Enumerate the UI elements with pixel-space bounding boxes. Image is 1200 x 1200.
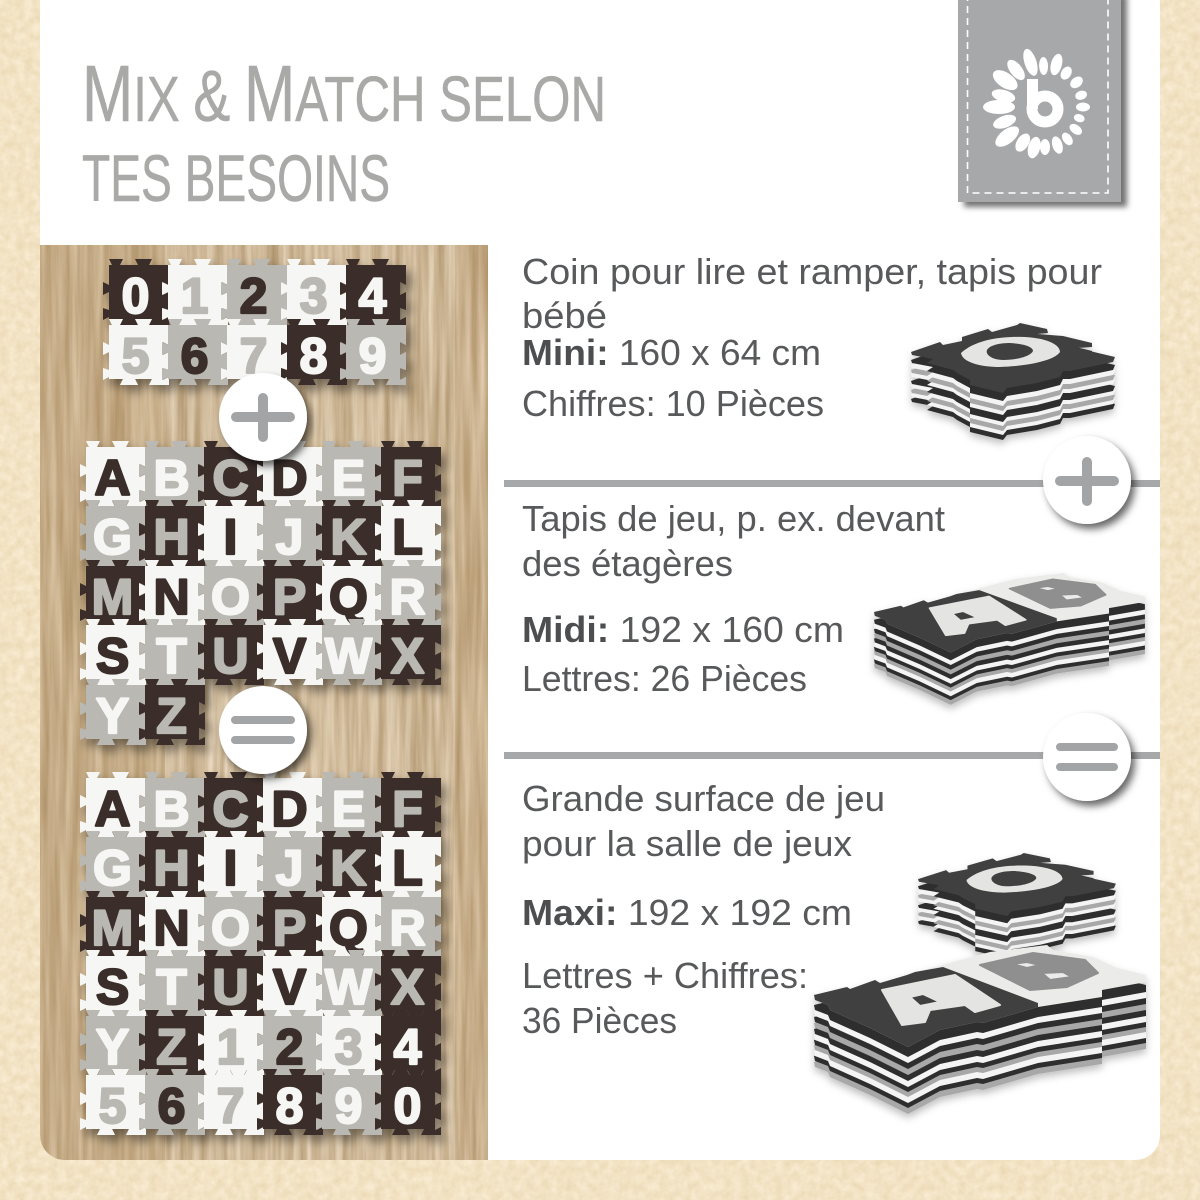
title: MIX & MATCH SELON xyxy=(82,49,606,138)
brand tag with logo xyxy=(958,0,1121,202)
puzzle mat: numbers 0-9: 8 xyxy=(300,328,327,384)
puzzle stack: maxi xyxy=(814,853,1146,1114)
puzzle mat: numbers 0-9: 7 xyxy=(240,328,267,384)
text block: mini: Chiffres: 10 Pièces xyxy=(522,383,824,424)
puzzle mat: numbers 0-9: 2 xyxy=(240,268,267,324)
text block: maxi: Maxi: 192 x 192 cm xyxy=(522,892,852,933)
title: TES BESOINS xyxy=(82,141,390,215)
puzzle mat: letters and numbers combined: X xyxy=(391,959,424,1015)
puzzle mat: letters A-Z: U xyxy=(212,628,249,684)
text block: midi: des étagères xyxy=(522,543,733,584)
text block: mini: Mini: 160 x 64 cm xyxy=(522,332,821,373)
puzzle mat: letters and numbers combined: I xyxy=(224,840,237,896)
text block: mini: bébé xyxy=(522,295,607,336)
puzzle mat: letters and numbers combined: N xyxy=(153,900,190,956)
puzzle mat: letters A-Z: Z xyxy=(156,688,187,744)
puzzle mat: letters A-Z: M xyxy=(92,569,133,625)
puzzle mat: letters A-Z: Y xyxy=(96,688,129,744)
divider with plus badge xyxy=(504,436,1160,524)
puzzle mat: letters and numbers combined: 3 xyxy=(335,1019,362,1075)
text block: mini xyxy=(522,251,1102,424)
puzzle mat: letters and numbers combined: 8 xyxy=(276,1078,303,1134)
puzzle mat: letters and numbers combined: U xyxy=(212,959,249,1015)
puzzle mat: letters and numbers combined: Q xyxy=(329,900,368,956)
puzzle mat: letters and numbers combined: 7 xyxy=(217,1078,244,1134)
puzzle mat: numbers 0-9: 1 xyxy=(181,268,208,324)
puzzle mat: letters and numbers combined: M xyxy=(92,900,133,956)
puzzle mat: letters and numbers combined: F xyxy=(392,781,423,837)
divider with equals badge xyxy=(504,713,1160,801)
puzzle mat: letters and numbers combined: 5 xyxy=(99,1078,126,1134)
puzzle mat: letters and numbers combined: H xyxy=(153,840,190,896)
puzzle mat: letters and numbers combined: T xyxy=(156,959,187,1015)
puzzle mat: letters and numbers combined: V xyxy=(273,959,307,1015)
puzzle mat: letters and numbers combined: G xyxy=(93,840,132,896)
text block: maxi: Lettres + Chiffres: xyxy=(522,955,808,996)
puzzle mat: letters A-Z: P xyxy=(273,569,306,625)
puzzle mat: letters and numbers combined: A xyxy=(94,781,131,837)
puzzle mat: letters and numbers combined: 2 xyxy=(276,1019,303,1075)
puzzle mat: letters A-Z: O xyxy=(211,569,250,625)
puzzle mat: letters and numbers combined: 1 xyxy=(217,1019,244,1075)
puzzle mat: letters and numbers combined: S xyxy=(96,959,129,1015)
puzzle mat: letters and numbers combined: L xyxy=(392,840,423,896)
puzzle mat: letters A-Z: W xyxy=(325,628,373,684)
text block: midi: Midi: 192 x 160 cm xyxy=(522,609,844,650)
puzzle mat: letters A-Z: H xyxy=(153,509,190,565)
puzzle mat: letters A-Z: K xyxy=(330,509,367,565)
puzzle mat: letters and numbers combined: K xyxy=(330,840,367,896)
puzzle mat: letters and numbers combined: O xyxy=(211,900,250,956)
puzzle mat: letters and numbers combined: B xyxy=(153,781,190,837)
puzzle mat: numbers 0-9 xyxy=(103,259,406,385)
text block: maxi xyxy=(522,778,885,1041)
puzzle mat: letters and numbers combined: J xyxy=(276,840,303,896)
puzzle mat: letters and numbers combined: Z xyxy=(156,1019,187,1075)
puzzle mat: letters and numbers combined: D xyxy=(271,781,308,837)
puzzle mat: letters and numbers combined: R xyxy=(389,900,426,956)
puzzle mat: letters A-Z: N xyxy=(153,569,190,625)
equals badge on wood xyxy=(219,686,307,774)
puzzle mat: letters and numbers combined: C xyxy=(212,781,249,837)
text block: maxi: pour la salle de jeux xyxy=(522,823,852,864)
puzzle mat: letters A-Z: J xyxy=(276,509,303,565)
puzzle mat: letters A-Z: L xyxy=(392,509,423,565)
text block: mini: Coin pour lire et ramper, tapis pour xyxy=(522,251,1102,292)
puzzle mat: numbers 0-9: 9 xyxy=(359,328,386,384)
text block: midi: Lettres: 26 Pièces xyxy=(522,658,807,699)
plus badge on wood xyxy=(219,373,307,461)
puzzle mat: letters A-Z: I xyxy=(224,509,237,565)
wood floor panel xyxy=(40,245,488,1160)
puzzle mat: letters A-Z: Q xyxy=(329,569,368,625)
puzzle mat: letters A-Z: D xyxy=(271,450,308,506)
text block: midi: Tapis de jeu, p. ex. devant xyxy=(522,498,945,539)
puzzle mat: letters and numbers combined: 9 xyxy=(335,1078,362,1134)
puzzle mat: numbers 0-9: 4 xyxy=(359,268,387,324)
puzzle mat: letters A-Z: G xyxy=(93,509,132,565)
puzzle mat: letters A-Z: R xyxy=(389,569,426,625)
title xyxy=(82,49,606,215)
puzzle mat: letters A-Z: C xyxy=(212,450,249,506)
puzzle mat: letters A-Z: T xyxy=(156,628,187,684)
puzzle mat: letters and numbers combined: E xyxy=(332,781,365,837)
text block: maxi: Grande surface de jeu xyxy=(522,778,885,819)
puzzle mat: letters and numbers combined: Y xyxy=(96,1019,129,1075)
puzzle mat: numbers 0-9: 6 xyxy=(181,328,208,384)
puzzle mat: numbers 0-9: 0 xyxy=(122,268,149,324)
puzzle mat: letters A-Z: S xyxy=(96,628,129,684)
puzzle mat: letters A-Z: A xyxy=(94,450,131,506)
puzzle mat: numbers 0-9: 3 xyxy=(300,268,327,324)
puzzle mat: letters and numbers combined: P xyxy=(273,900,306,956)
puzzle mat: letters A-Z: X xyxy=(391,628,424,684)
puzzle mat: letters and numbers combined: 4 xyxy=(394,1019,422,1075)
puzzle mat: letters A-Z: F xyxy=(392,450,423,506)
puzzle mat: letters and numbers combined xyxy=(80,772,441,1135)
puzzle stack: mini xyxy=(911,323,1115,440)
puzzle mat: letters A-Z: E xyxy=(332,450,365,506)
text block: midi xyxy=(522,498,945,699)
text block: maxi: 36 Pièces xyxy=(522,1000,677,1041)
puzzle mat: letters and numbers combined: 0 xyxy=(394,1078,421,1134)
puzzle stack: midi xyxy=(874,573,1145,705)
puzzle mat: letters A-Z xyxy=(80,441,441,745)
puzzle mat: numbers 0-9: 5 xyxy=(122,328,149,384)
puzzle mat: letters A-Z: V xyxy=(273,628,307,684)
puzzle mat: letters and numbers combined: W xyxy=(325,959,373,1015)
puzzle mat: letters A-Z: B xyxy=(153,450,190,506)
puzzle mat: letters and numbers combined: 6 xyxy=(158,1078,185,1134)
